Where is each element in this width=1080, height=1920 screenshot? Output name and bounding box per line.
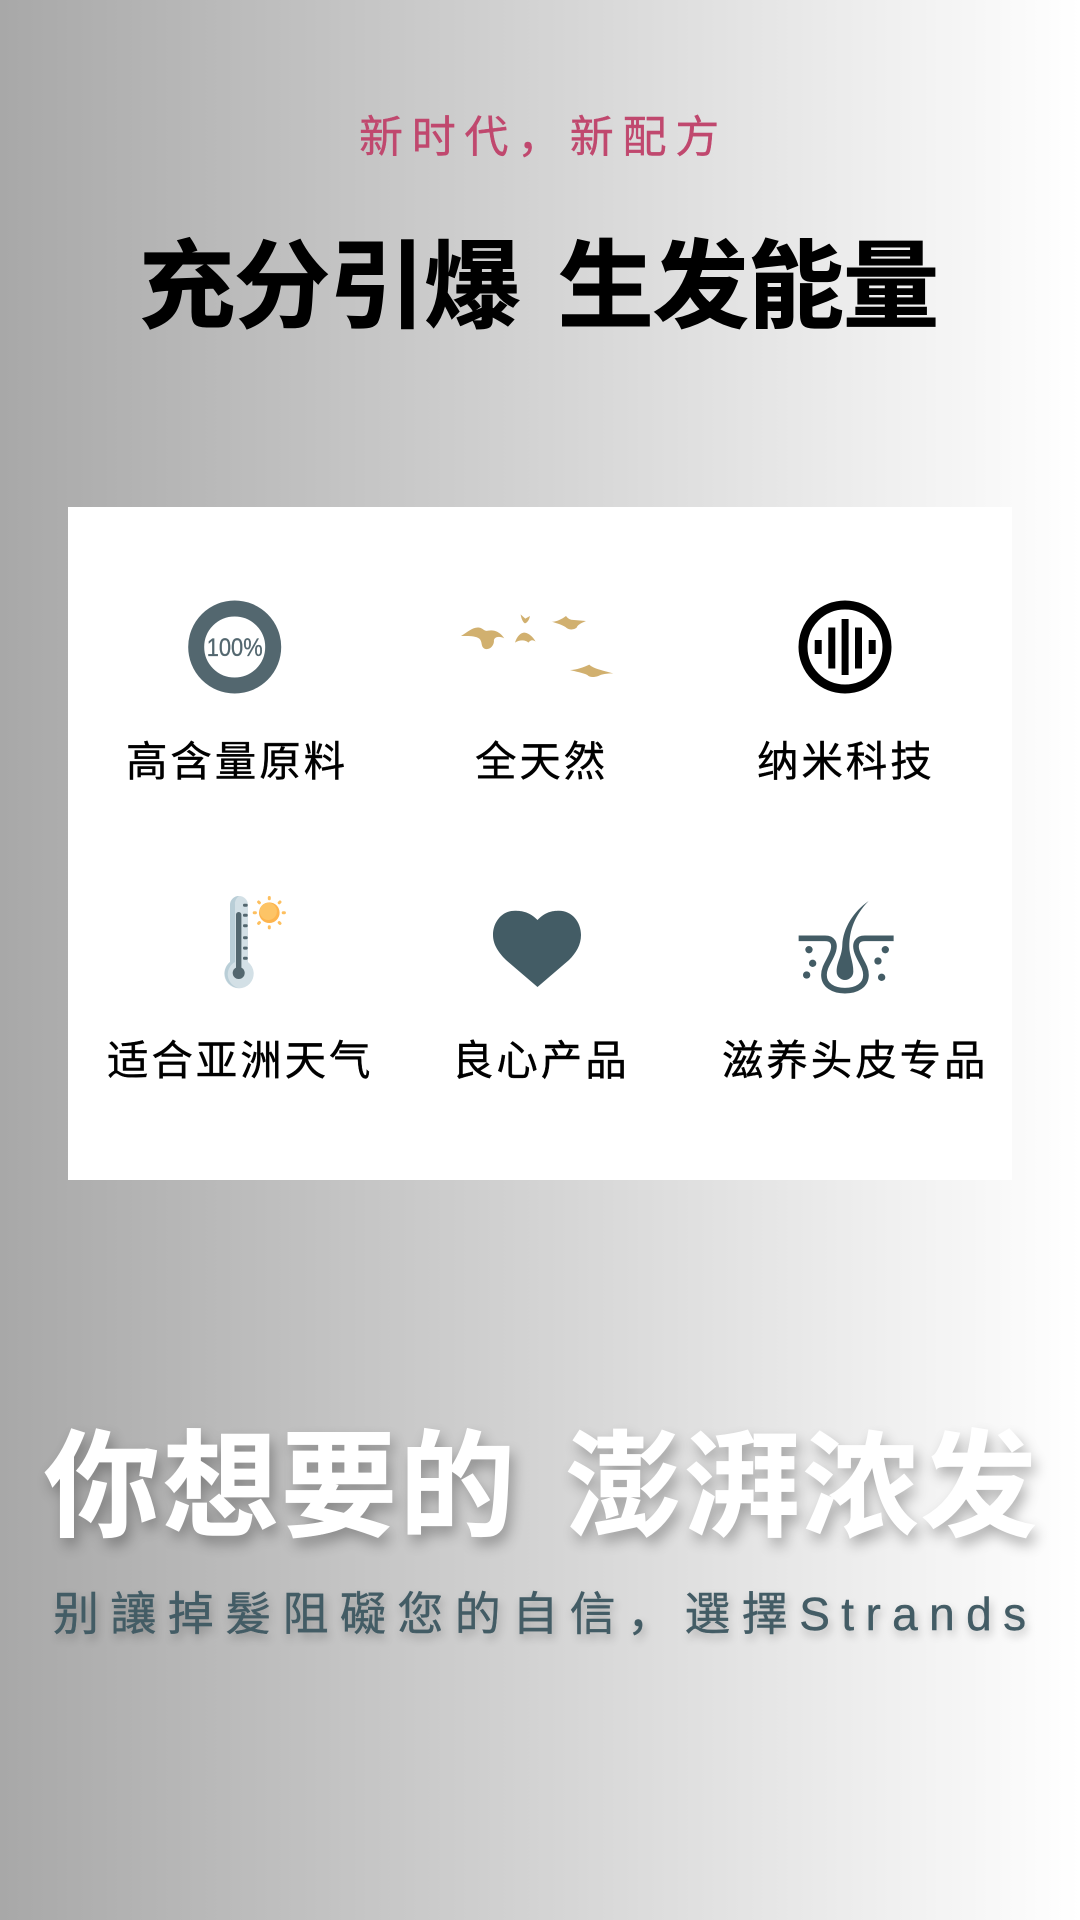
label: scalp: 滋养头皮专品	[722, 1037, 988, 1084]
icon: heart	[493, 911, 581, 987]
icon: nano sound wave	[803, 605, 887, 689]
label: high content: 高含量原料	[126, 738, 348, 785]
icon: thermometer and sun	[224, 896, 284, 988]
bottom headline: 你想要的 澎湃浓发	[44, 1422, 1040, 1552]
icon: hair follicle	[799, 901, 894, 991]
label: conscience: 良心产品	[452, 1037, 630, 1084]
label: natural: 全天然	[475, 738, 608, 785]
bottom subtext: 别讓掉髮阻礙您的自信，選擇Strands	[53, 1588, 1038, 1640]
icon: 100% ring	[196, 608, 273, 686]
icon: birds	[461, 614, 613, 677]
panel: features	[68, 507, 1012, 1180]
subtitle: 新时代，新配方	[359, 113, 728, 162]
label: nano: 纳米科技	[757, 738, 935, 785]
title: 充分引爆 生发能量	[139, 234, 938, 341]
label: climate: 适合亚洲天气	[107, 1037, 373, 1084]
icon: 100% ring: 100%	[207, 634, 263, 662]
